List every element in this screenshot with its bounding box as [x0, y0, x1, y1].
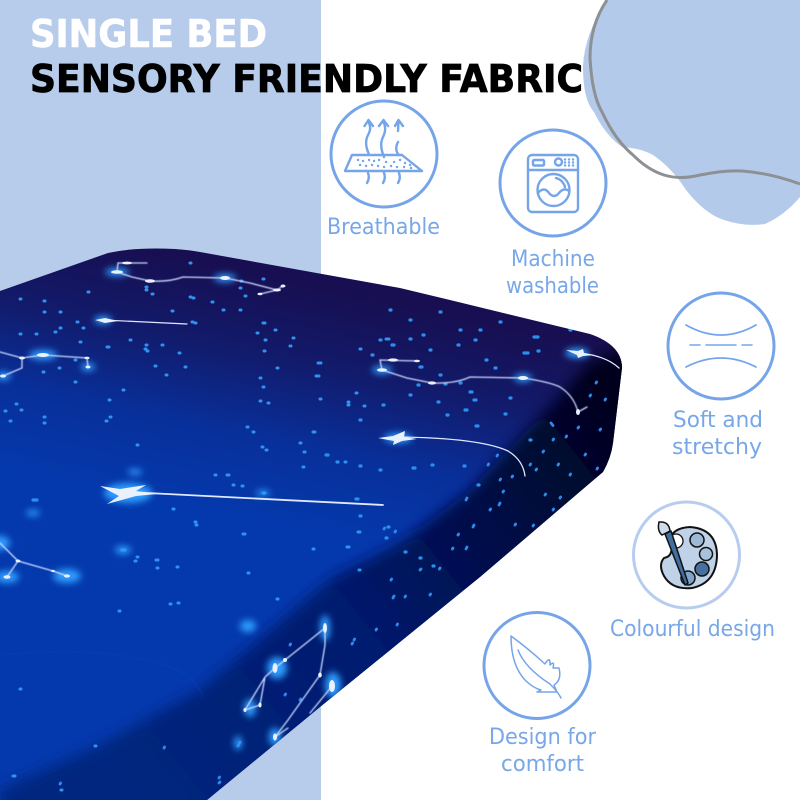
constellation lines: [0, 263, 587, 737]
icon: washing machine: [528, 155, 578, 212]
feature: design for comfort: comfort: [501, 752, 584, 777]
label: breathable: Breathable: [327, 215, 440, 240]
feature: machine washable: washable: [506, 274, 599, 299]
star dots: [5, 252, 606, 790]
decorative line: grey curve over blob: [590, 0, 800, 184]
feature: soft and stretchy: stretchy: [672, 435, 762, 460]
glows: [0, 268, 589, 750]
feature: machine washable: [500, 130, 606, 299]
title: single bed: SINGLE BED: [30, 12, 267, 56]
bright stars: [0, 262, 595, 740]
label: machine washable: Machine: [511, 247, 595, 272]
feature: soft and stretchy: [668, 293, 774, 460]
icon: paint palette and brush: [658, 522, 717, 588]
decorative blob: top right: [583, 0, 800, 225]
fold crease at bed corner: [199, 689, 204, 697]
feature: design for comfort: [484, 612, 597, 777]
photo: fitted sheet with constellation print: [0, 240, 660, 800]
label: design for comfort: Design for: [489, 725, 597, 750]
icon: stretch lines: [686, 325, 756, 367]
title: sensory friendly fabric: SENSORY FRIENDLY FABRIC: [30, 57, 583, 101]
icon: feather: [511, 636, 561, 698]
shooting star tails: [103, 320, 619, 505]
label: soft and stretchy: Soft and: [673, 408, 763, 433]
icon: breathable fabric: [345, 120, 422, 183]
label: colourful design: Colourful design: [610, 617, 775, 642]
background panel: left blue block: [0, 0, 321, 800]
feature: breathable: [327, 101, 440, 240]
feature: colourful design: [610, 502, 775, 642]
